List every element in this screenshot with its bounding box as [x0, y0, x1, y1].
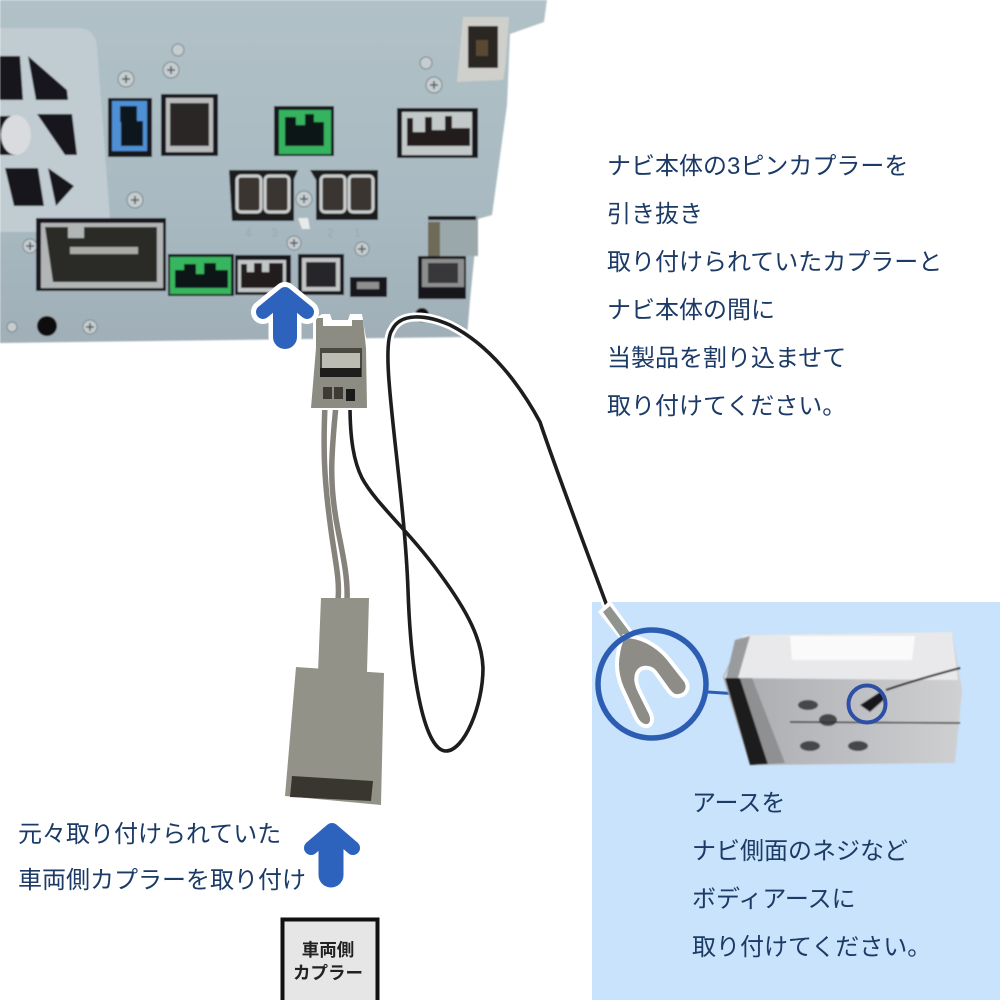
target connector	[235, 255, 291, 295]
grey connector	[161, 94, 218, 156]
wires: grey leads	[324, 405, 347, 600]
arrow: to navigation connector	[263, 294, 307, 337]
lighter plate	[0, 28, 110, 232]
text block: main instructions: 引き抜き	[607, 201, 703, 228]
text block: earth instructions: ボディアースに	[692, 886, 856, 913]
text block: main instructions: ナビ本体の3ピンカプラーを	[607, 153, 908, 180]
screws	[7, 44, 468, 334]
photo: earth terminal	[598, 600, 688, 726]
grey small connector	[298, 254, 344, 295]
label box: vehicle side coupler: 車両側	[302, 940, 354, 960]
wide connector top right	[397, 108, 478, 158]
text block: main instructions	[607, 153, 942, 420]
callout: zoom circle and pointer	[598, 630, 830, 738]
label box: vehicle side coupler: カプラー	[293, 963, 363, 983]
arrow: to vehicle side plug	[311, 830, 353, 875]
panel: earth instructions background	[592, 602, 1000, 1000]
photo: navigation unit rear	[0, 0, 547, 343]
connector: nav side plug	[309, 314, 370, 410]
port numbers: 3	[271, 226, 278, 240]
capacitor label	[1, 115, 31, 155]
port numbers: 1	[354, 226, 361, 240]
text block: main instructions: 取り付けてください。	[607, 393, 846, 420]
text block: earth instructions: ナビ側面のネジなど	[692, 838, 908, 865]
text block: vehicle connector note: 元々取り付けられていた	[18, 821, 281, 848]
terminal crimp	[598, 600, 636, 644]
photo: unit side view	[723, 632, 962, 765]
blue connector	[108, 98, 152, 157]
hole	[37, 316, 57, 336]
terminal fork	[617, 636, 688, 726]
callout: small ground screw circle	[848, 686, 886, 722]
text block: main instructions: ナビ本体の間に	[607, 297, 775, 324]
text block: main instructions: 当製品を割り込ませて	[607, 345, 846, 372]
green connector top	[274, 106, 334, 156]
top right connector	[457, 17, 509, 82]
text block: vehicle connector note	[18, 821, 306, 894]
port numbers: 4	[245, 226, 252, 240]
port numbers: 2	[327, 226, 334, 240]
wire: black ground lead	[350, 317, 607, 751]
right cluster connector	[428, 216, 478, 256]
text block: earth instructions: 取り付けてください。	[692, 934, 931, 961]
text block: earth instructions	[692, 790, 931, 961]
device body	[0, 0, 547, 343]
quad connectors	[229, 170, 298, 221]
label box: vehicle side coupler	[282, 920, 378, 1000]
text block: vehicle connector note: 車両側カプラーを取り付け	[18, 867, 306, 894]
usb port	[350, 277, 387, 297]
large harness connector	[36, 218, 166, 291]
text block: earth instructions: アースを	[692, 790, 785, 817]
green connector bottom	[168, 254, 234, 296]
text block: main instructions: 取り付けられていたカプラーと	[607, 249, 942, 276]
port numbers	[245, 226, 361, 240]
small white clip	[298, 218, 310, 229]
connector: vehicle side plug	[285, 598, 384, 805]
vent holes	[0, 56, 77, 206]
